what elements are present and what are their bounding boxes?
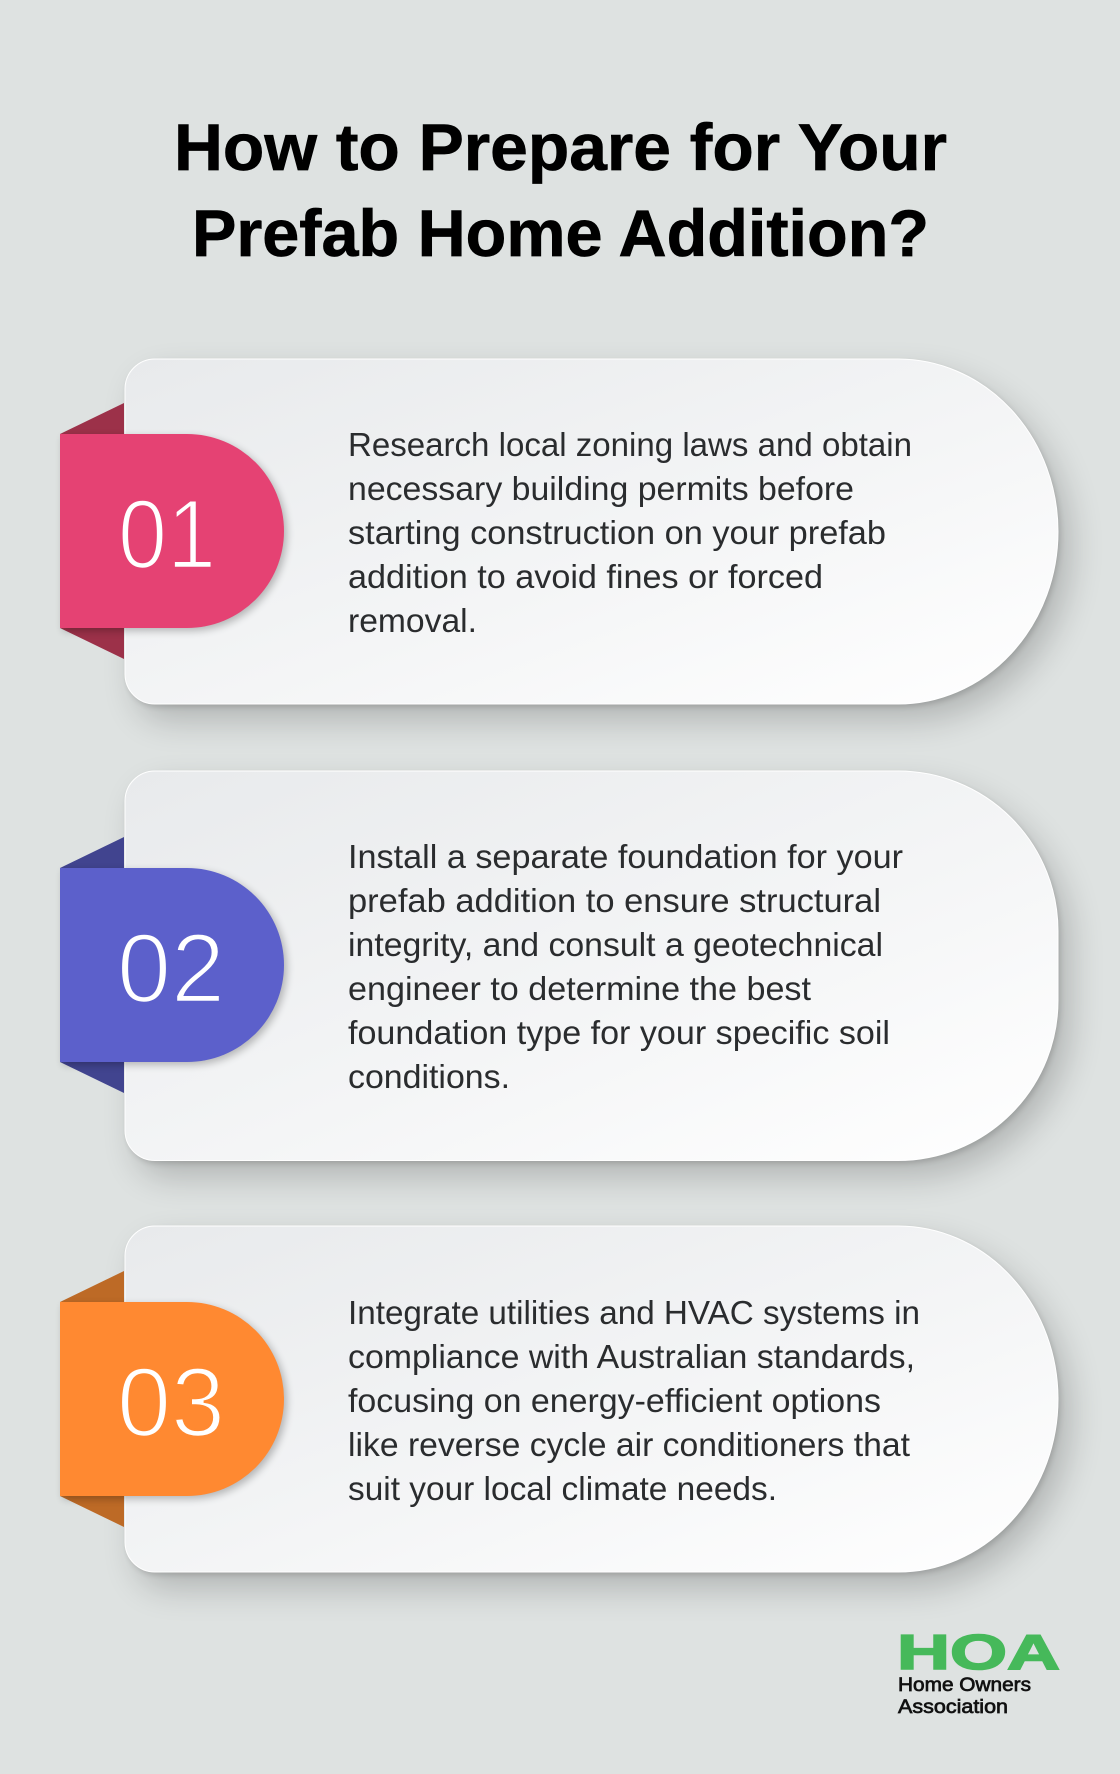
number: 01: 01 — [118, 479, 216, 589]
number: 02: 02 — [117, 913, 225, 1023]
text: step 1: addition to avoid fines or forced — [348, 558, 823, 595]
text: step 1: Research local zoning laws and obtain — [348, 426, 912, 463]
text: step 3: like reverse cycle air conditioners that — [348, 1426, 910, 1463]
panel: step 3 — [60, 1226, 1070, 1588]
text: step 3: suit your local climate needs. — [348, 1470, 777, 1507]
text: step 1: starting construction on your prefab — [348, 514, 886, 551]
text: step 3: Integrate utilities and HVAC systems in — [348, 1294, 920, 1331]
card: step 1 — [125, 359, 1058, 704]
text: step 3 — [348, 1294, 920, 1507]
text: step 1 — [348, 426, 912, 639]
text: step 3: focusing on energy-efficient options — [348, 1382, 881, 1419]
text: step 2: conditions. — [348, 1058, 510, 1095]
text: step 1: necessary building permits before — [348, 470, 854, 507]
logo: HOA Home Owners Association — [897, 1626, 1060, 1718]
number: 03: 03 — [117, 1347, 225, 1457]
badge: step 2 — [60, 868, 287, 1065]
text: step 2: integrity, and consult a geotechnical — [348, 926, 883, 963]
card: step 2 — [125, 771, 1058, 1160]
card: step 3 — [125, 1226, 1058, 1572]
title — [174, 110, 947, 270]
badge: step 1 — [60, 434, 287, 631]
panel: step 1 — [60, 359, 1070, 720]
text: step 2: engineer to determine the best — [348, 970, 811, 1007]
text: step 2: Install a separate foundation for your — [348, 838, 903, 875]
ribbon fold: step 1 — [60, 403, 124, 659]
text: step 2: prefab addition to ensure structural — [348, 882, 881, 919]
badge: step 3 — [60, 1302, 287, 1499]
ribbon fold: step 2 — [60, 837, 124, 1093]
panel: step 2 — [60, 771, 1070, 1176]
logo: HOA Home Owners Association: Home Owners — [898, 1674, 1031, 1696]
title: Prefab Home Addition? — [192, 196, 929, 270]
text: step 2 — [348, 838, 903, 1095]
logo: HOA Home Owners Association: Association — [898, 1696, 1008, 1718]
logo: HOA Home Owners Association: HOA — [897, 1626, 1060, 1680]
ribbon fold: step 3 — [60, 1271, 124, 1527]
title: How to Prepare for Your — [174, 110, 947, 184]
text: step 3: compliance with Australian standards, — [348, 1338, 915, 1375]
text: step 1: removal. — [348, 602, 477, 639]
text: step 2: foundation type for your specific soil — [348, 1014, 890, 1051]
